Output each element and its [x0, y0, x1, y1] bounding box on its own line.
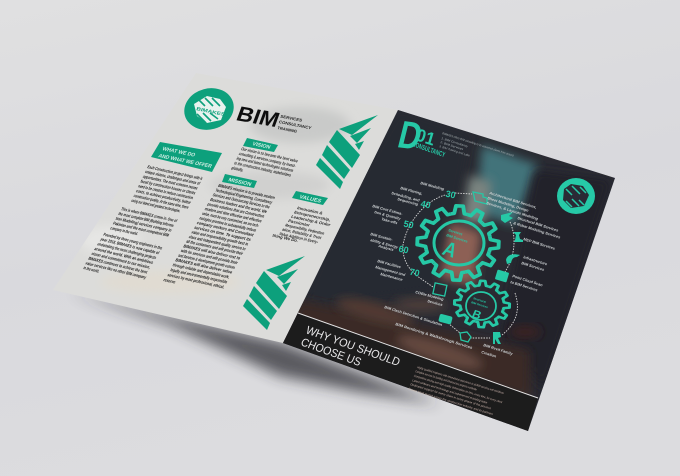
- text: intro paragraph: unique visions, challenges and areas of: [144, 169, 201, 186]
- big gear hub: BIM Services: [446, 233, 468, 244]
- service labels: Structural BIM Services: [517, 216, 559, 233]
- text: band fine print: Proven track record across the construction industry and its partners: [408, 387, 494, 416]
- text: mission: BIMAKES mission is to provide modern: [217, 183, 276, 200]
- heading: values: [292, 191, 328, 205]
- BIM wordmark: SERVICES: [280, 114, 303, 123]
- service labels: Creation: [481, 350, 498, 359]
- service labels: Sequencing: [397, 197, 420, 207]
- text: contact lines: BIMAKES offers BIM consulting to its esteemed clients from around: [442, 131, 515, 157]
- service labels: BIM Modeling: [420, 181, 446, 191]
- service labels: Scheduling, and: [391, 191, 421, 203]
- text: third paragraph: [83, 232, 164, 280]
- text: second paragraph: This is where BIMAKES comes in. One of: [120, 206, 178, 223]
- text: third paragraph: undertaking the most challenging projects: [97, 242, 157, 260]
- text: mission: BIMAKES will also deliver rest to: [183, 244, 241, 261]
- dotted timeline: [403, 193, 517, 338]
- logo circle: BIMAKES: [195, 106, 226, 118]
- text: vision: consulting & services company, by invest-: [238, 151, 297, 168]
- background city photo: [290, 110, 612, 400]
- heading: vision: VISION: [251, 141, 271, 151]
- heading: what we do: [151, 142, 222, 172]
- text: mission: through reliable and dependable work,: [172, 262, 231, 279]
- small gear hub: Structural: [473, 296, 487, 304]
- big gear hub: A: [439, 238, 461, 262]
- heading: mission: MISSION: [227, 177, 252, 188]
- service labels: BIM Sustain-: [370, 232, 394, 242]
- big gear hub: [434, 221, 484, 265]
- text: mission: legally and environmentally responsible: [170, 267, 229, 284]
- icon: bottom arrow logo: [243, 256, 305, 330]
- service labels: & Rebar Modeling Services: [513, 221, 561, 240]
- text: mission: modern and time effective and effective: [204, 206, 263, 223]
- heading: vision: [243, 138, 278, 152]
- text: band fine print: [408, 365, 505, 416]
- text: mission: class and independent quality service to: [188, 234, 247, 251]
- text: mission: reserve: [163, 277, 177, 285]
- panel: right page: [283, 110, 615, 431]
- text: values: Passion/or: [287, 218, 311, 228]
- text: values: thing We Do.: [272, 233, 299, 243]
- timeline numbers: [398, 188, 457, 279]
- service labels: [370, 181, 561, 359]
- big gear: [416, 204, 500, 282]
- text: third paragraph: BIMAKES continues to achieve the best: [88, 256, 149, 275]
- text: band fine print: Competitive pricing and high quality deliverables on time, every time, for every client: [413, 374, 503, 404]
- text: band fine print: Dedicated support for every client in every phase of the process: [410, 382, 492, 410]
- text: intro paragraph: opportunities. The most common issues: [142, 174, 199, 191]
- text: values: Entrepreneurship,: [293, 210, 331, 222]
- service labels: Architectural BIM Services,: [489, 191, 537, 210]
- service labels: BIM Services: [521, 261, 545, 272]
- text: mission: BIMAKES will also deliver value: [175, 258, 234, 275]
- timeline numbers: 70: [409, 266, 421, 279]
- text: mission: nologies promise to substantially reduce: [199, 216, 258, 233]
- text: intro paragraph: need to be creative to reduce construction: [137, 184, 194, 200]
- logo: D01 consultancy: [394, 113, 446, 159]
- logo: D01 consultancy: CONSULTANCY: [411, 141, 446, 159]
- BIM wordmark: TRAINING: [277, 125, 298, 134]
- text: contact lines: 1. BIM Consultancy: [441, 136, 469, 148]
- service labels: BIM Planing,: [400, 186, 423, 196]
- BIM wordmark: BIM: [233, 103, 282, 132]
- text: mission: company workers and Consultant: [196, 220, 255, 237]
- heading: what we do: WHAT WE DO: [161, 146, 196, 158]
- shadow under brochure: [70, 292, 440, 404]
- timeline numbers: 30: [445, 188, 457, 201]
- service labels: BIM Facilities: [377, 259, 401, 269]
- bottom band: [283, 313, 538, 431]
- service labels: Management and: [375, 265, 407, 277]
- text: mission: provide solutions that are Construction: [207, 202, 265, 219]
- text: vision: ing new and latest technologies solutions: [236, 156, 295, 173]
- text: intro paragraph: [130, 164, 204, 213]
- text: vision: globally.: [231, 165, 244, 172]
- text: second paragraph: tion Modeling) services company in: [115, 216, 173, 233]
- text: second paragraph: the most complete BIM (Building Informa-: [118, 211, 176, 228]
- text: intro paragraph: Each Construction project brings with it: [147, 164, 204, 181]
- logo: D01 consultancy: D: [394, 113, 426, 158]
- service labels: Point Cloud Scan: [512, 274, 544, 288]
- text: vision: [231, 146, 299, 178]
- text: mission: and Services & development growth custom: [177, 253, 236, 270]
- text: mission: services by most professional, ethical,: [167, 272, 225, 289]
- text: values: Value Addition in Every-: [278, 231, 320, 244]
- service labels: Take-offs: [381, 217, 398, 225]
- text: third paragraph: year 2018, BIMAKES is now capable of: [100, 237, 161, 255]
- timeline numbers: 60: [398, 243, 410, 256]
- text: third paragraph: vision and commitment to our mission,: [91, 251, 151, 270]
- text: second paragraph: company in the world.: [109, 226, 139, 236]
- text: band fine print: Complete services for building and infrastructure projects worldwide: [415, 369, 478, 392]
- text: intro paragraph: costs, to achieve productivity, better: [135, 188, 192, 205]
- service labels: COBie Modeling: [415, 290, 445, 302]
- service labels: BIM Rendering & Walkthrough Services: [395, 322, 473, 350]
- service labels: Maintenance: [380, 272, 403, 282]
- service labels: Infrastructure: [523, 255, 548, 266]
- text: mission: with its services and will provide their: [179, 248, 239, 265]
- text: intro paragraph: construction quality. At the same time, there: [133, 193, 190, 210]
- logo: D01 consultancy: 01: [414, 124, 438, 150]
- small gear hub: BIM Services: [471, 300, 489, 309]
- text: third paragraph: Founded by three young engineers in the: [103, 232, 164, 251]
- service labels: Sheet Modeling, Design: [487, 196, 530, 213]
- text: mission: value, must be very customized, we are tech-: [201, 211, 260, 228]
- text: third paragraph: in the world.: [83, 265, 100, 274]
- small gear hub: [466, 292, 496, 322]
- text: vision: to the construction industry, stakeholders: [233, 161, 292, 178]
- text: band fine print: Latest software and technology and experienced modeling team: [412, 378, 489, 405]
- service labels: Services, & Layouts Modeling: [486, 201, 539, 221]
- brochure: [53, 73, 615, 431]
- text: band fine print: Highly qualified engineers with international experience in all BIM services and workflows: [417, 365, 505, 395]
- service labels: BIM Cost Estima-: [372, 204, 404, 216]
- text: intro paragraph: faced by construction houses or clients: [140, 179, 197, 195]
- text: second paragraph: Pakistan and the most competent BIM: [112, 221, 170, 238]
- icon: top arrow logo: [316, 115, 378, 189]
- text: values: [272, 205, 332, 244]
- service labels: ability & Energy: [370, 238, 400, 250]
- service labels: to BIM Services: [510, 280, 538, 292]
- BIM wordmark: CONSULTANCY: [278, 119, 313, 130]
- text: vision: Our vision is to become the best value: [240, 146, 299, 163]
- BIM wordmark: [233, 103, 313, 134]
- timeline numbers: 50: [403, 218, 415, 231]
- heading: why you should choose us: WHY YOU SHOULD: [304, 325, 402, 369]
- big gear hub: Services: [448, 228, 463, 236]
- text: mission: value and responsibility growth best in: [191, 230, 249, 247]
- icons: service symbols: [433, 192, 523, 344]
- panel: left page: [75, 88, 378, 343]
- service labels: tion & Quantity: [374, 210, 402, 221]
- small gear hub: B: [470, 307, 484, 322]
- text: mission: all the customers and will provide their: [185, 239, 244, 256]
- heading: why you should choose us: CHOOSE US: [299, 337, 363, 369]
- small gear: [454, 279, 510, 329]
- text: values: Innovation &: [296, 205, 324, 215]
- text: contact lines: 3. BIM Training and Labs: [439, 144, 471, 158]
- text: values: Leadership & Order: [290, 214, 332, 227]
- text: mission: Services and Outsourcing Services to the: [212, 192, 271, 209]
- service labels: BIM Clash Detection & Simulation: [384, 305, 443, 327]
- service labels: Analysis: [378, 244, 394, 252]
- heading: what we do: AND WHAT WE OFFER: [157, 153, 213, 170]
- timeline numbers: 40: [420, 198, 432, 211]
- text: values: Responsibility, Federation: [284, 223, 326, 236]
- text: third paragraph: value services like no other BIM company: [85, 261, 147, 280]
- heading: values: VALUES: [298, 194, 323, 205]
- text: intro paragraph: using our latest and greatest technologies.: [130, 198, 181, 213]
- text: contact lines: 2. BIM Services: [440, 140, 465, 151]
- text: mission: services on time. To support its: [193, 225, 252, 242]
- service labels: MEP BIM Services: [523, 237, 556, 251]
- text: values: ation, Reliability & Trust: [281, 227, 323, 240]
- text: mission: Technological Engineering, Consultancy: [215, 188, 274, 205]
- text: third paragraph: around the world. With an ambitious: [94, 246, 155, 265]
- text: second paragraph: [109, 206, 178, 238]
- text: mission: [163, 183, 276, 289]
- heading: mission: [222, 174, 257, 188]
- logo badge: [557, 178, 595, 214]
- logo circle: [180, 83, 238, 135]
- service labels: Services: [427, 299, 443, 307]
- service labels: BIM Revit Family: [483, 343, 514, 356]
- text: mission: Business leaders and the world. We: [209, 197, 268, 214]
